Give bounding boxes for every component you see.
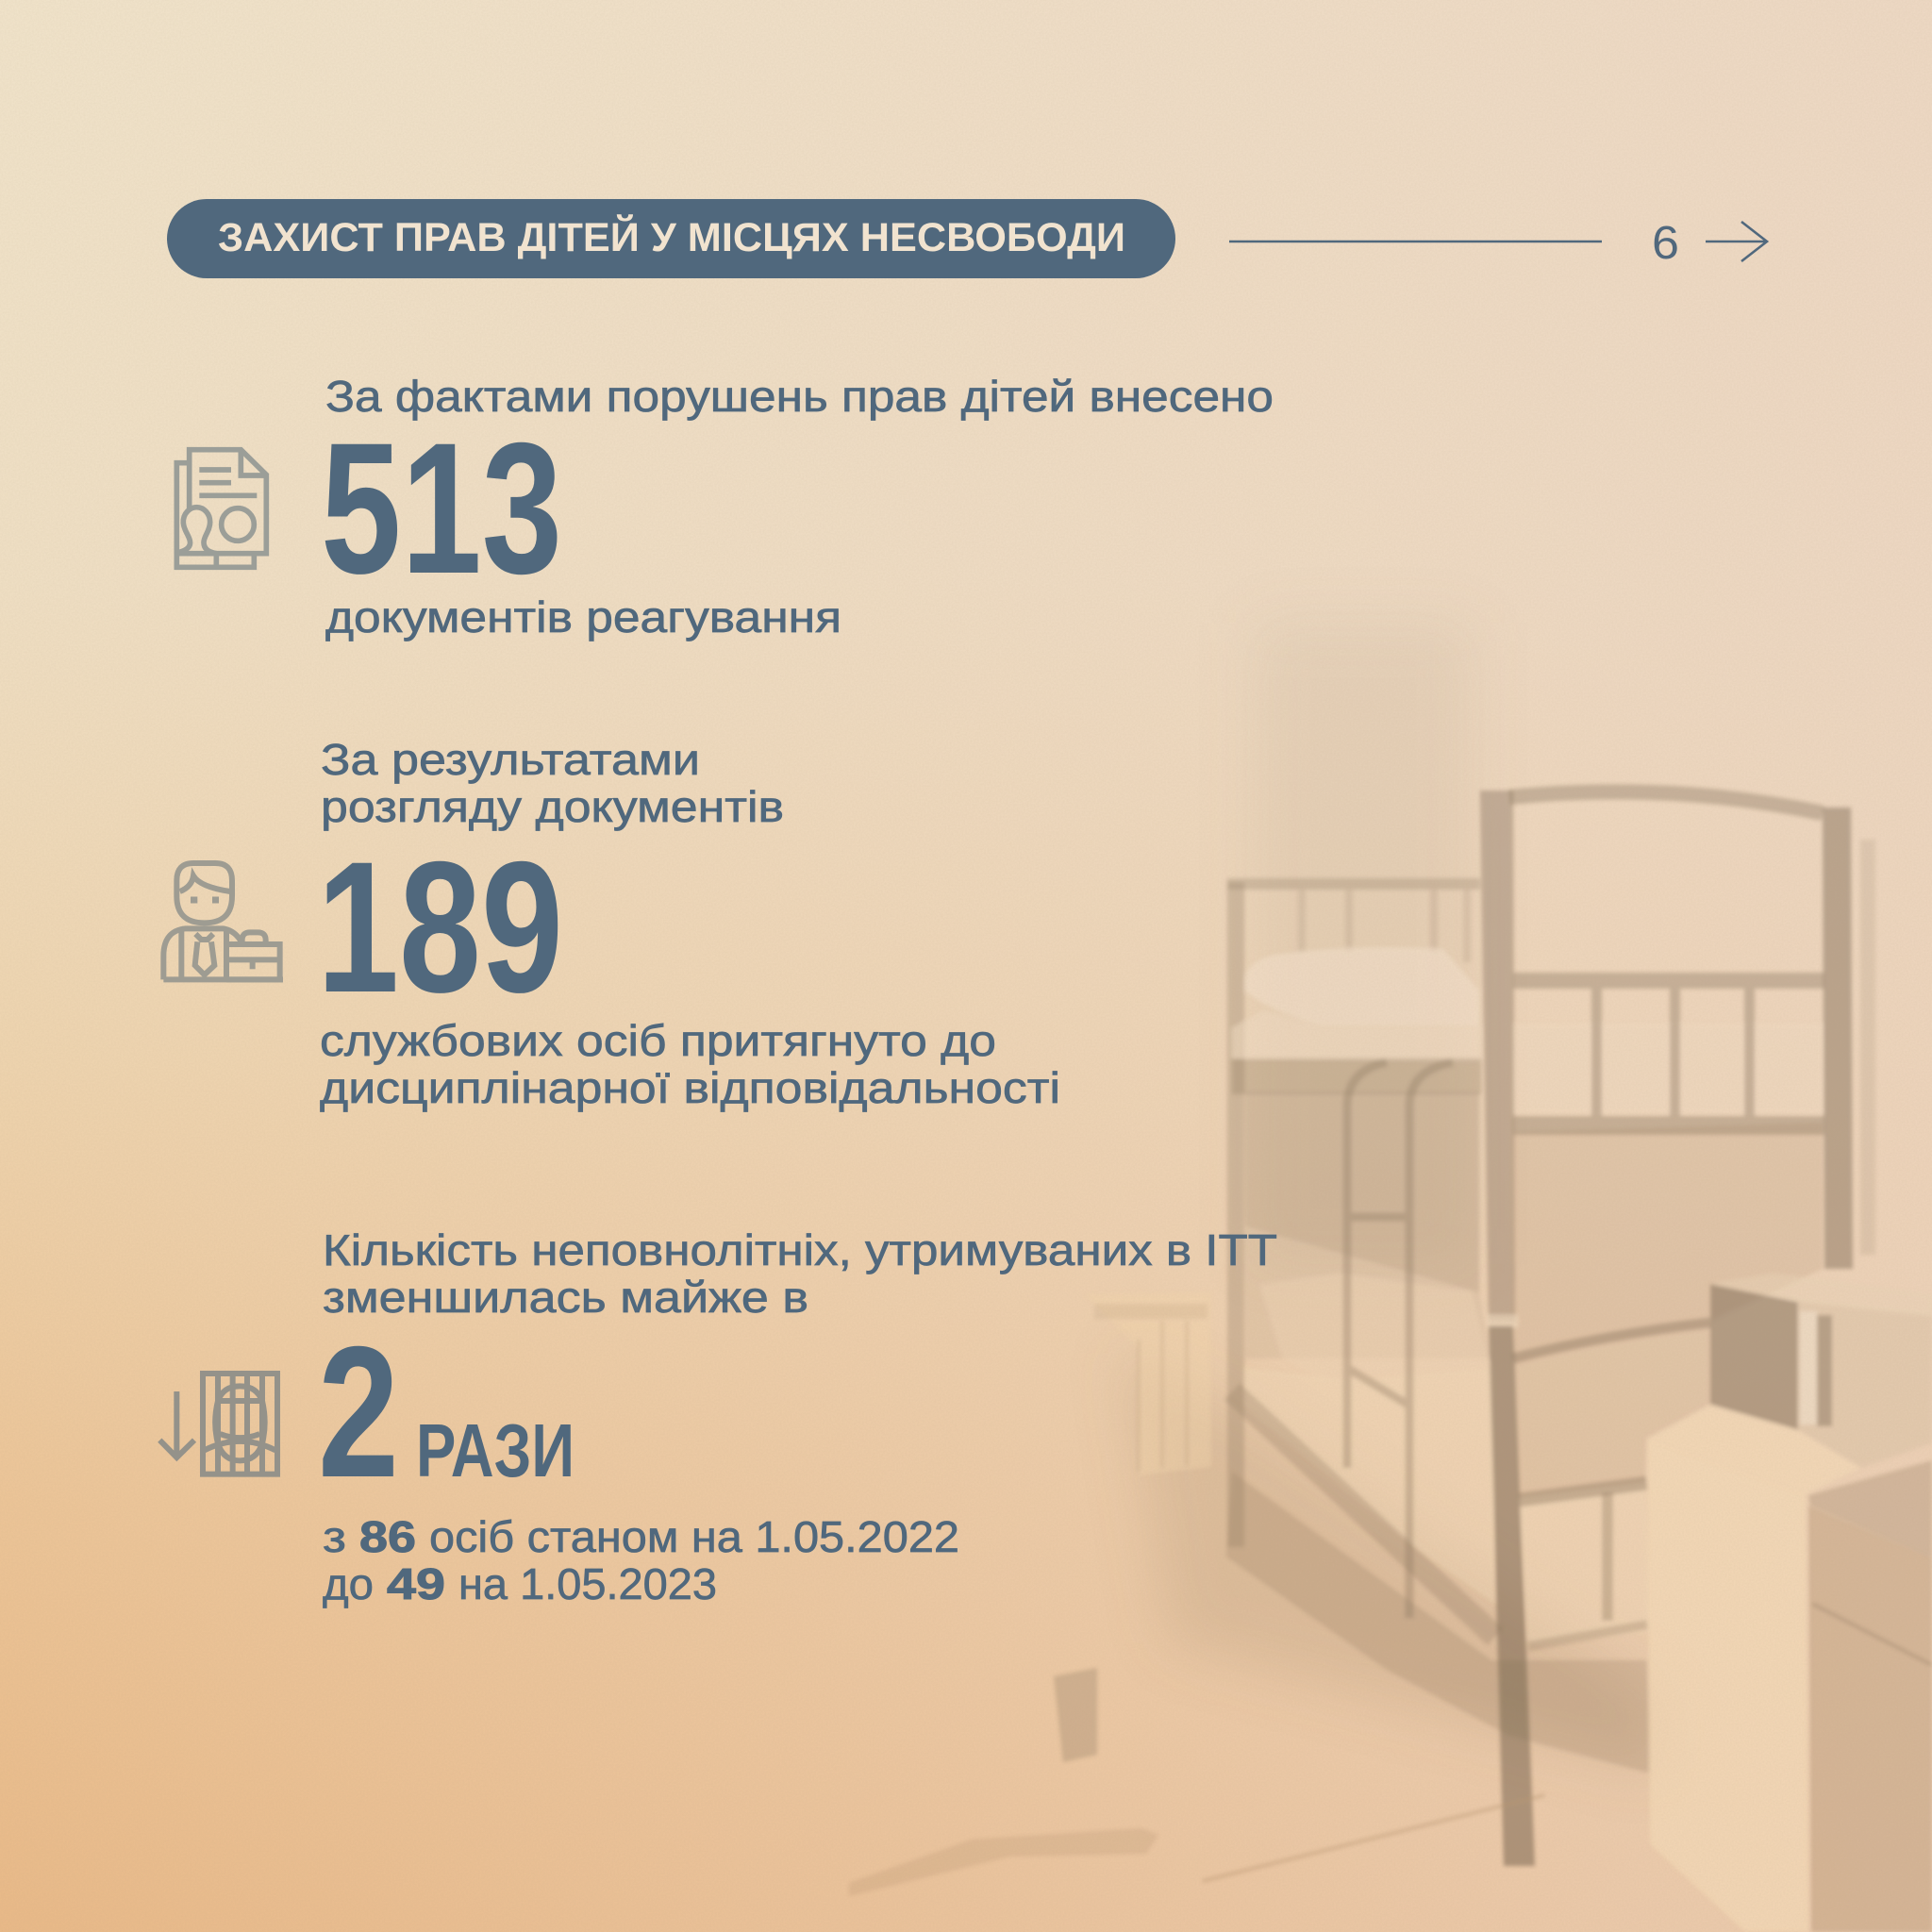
detail line 1: осіб станом на 1.05.2022 <box>429 1512 959 1561</box>
header pill <box>167 199 1175 278</box>
detail line 1: 86 <box>359 1512 416 1561</box>
photo: far bed frame <box>1232 1058 1481 1094</box>
photo: near bed posts <box>1823 808 1853 1269</box>
photo: fridge top <box>1647 1405 1861 1494</box>
photo: near frame headboard <box>1509 791 1823 813</box>
photo: far bed post and rail <box>1227 882 1244 1547</box>
detail line 1: з <box>323 1512 346 1561</box>
detail line 2: на 1.05.2023 <box>458 1559 717 1608</box>
detail line 2: 49 <box>387 1559 445 1608</box>
number 513: 513 <box>321 404 562 612</box>
header title: ЗАХИСТ ПРАВ ДІТЕЙ У МІСЦЯХ НЕСВОБОДИ <box>218 214 1125 260</box>
intro text line 2: розгляду документів <box>321 782 784 831</box>
intro text line 2: зменшилась майже в <box>323 1273 808 1322</box>
photo: wall curtain shading <box>1123 623 1660 1774</box>
icon: down arrow and barred window <box>159 1374 277 1474</box>
detail line 2 <box>323 1559 717 1608</box>
photo: lower bed mattress <box>1245 1368 1494 1604</box>
caption line 1: службових осіб притягнуто до <box>320 1016 996 1065</box>
block: officials held liable <box>163 735 1060 1112</box>
photo: wall behind lower bed <box>1513 1123 1823 1358</box>
detail line 2: до <box>323 1559 374 1608</box>
photo: lower bed frame diagonal <box>1232 1391 1495 1637</box>
photo: far bed mattress <box>1232 1009 1481 1061</box>
icon: next arrow <box>1706 222 1767 261</box>
caption line 2: дисциплінарної відповідальності <box>320 1063 1060 1112</box>
photo: rug edge <box>1203 1795 1544 1881</box>
number 189: 189 <box>317 823 563 1031</box>
photo: desk <box>1808 1460 1932 1558</box>
number 2: 2 <box>318 1307 399 1516</box>
photo: upper mattress in near frame <box>1513 1024 1823 1113</box>
icon: official with briefcase <box>163 863 283 979</box>
photo: ladder rails <box>1347 1062 1453 1618</box>
photo: far bed dark underside <box>1245 1092 1479 1292</box>
photo: lower mattress in near frame <box>1520 1483 1651 1646</box>
photo: floor shadow under bunk <box>1226 1472 1651 1774</box>
photo: microwave <box>1710 1284 1798 1430</box>
background photo: bunk beds room <box>849 623 1932 1932</box>
page number: 6 <box>1652 218 1679 269</box>
photo: lower bed pillow <box>1260 1274 1491 1379</box>
unit: times: РАЗИ <box>416 1408 575 1492</box>
intro text: За фактами порушень прав дітей внесено <box>325 372 1274 421</box>
caption: документів реагування <box>325 592 841 641</box>
divider line <box>1229 241 1602 242</box>
block: documents of response <box>176 372 1274 641</box>
block: minors detained <box>159 1225 1277 1608</box>
intro text line 1: За результатами <box>321 735 700 784</box>
photo: foreground bed stand <box>1054 1668 1097 1762</box>
photo: shadow on wall from far post <box>1860 840 1875 1255</box>
photo: foreground bed shadow <box>849 1828 1158 1896</box>
photo: radiator <box>1085 1292 1211 1475</box>
photo: far bed pillow <box>1245 947 1479 1025</box>
icon: document with stamp <box>176 450 266 567</box>
intro text line 1: Кількість неповнолітніх, утримуваних в ІТТ <box>323 1225 1277 1274</box>
photo: fridge front <box>1647 1439 1808 1932</box>
